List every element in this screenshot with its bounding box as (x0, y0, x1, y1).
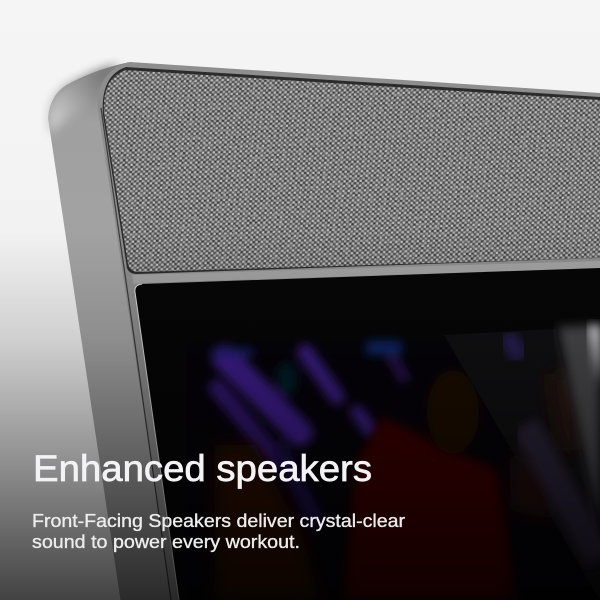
display screen (135, 268, 600, 600)
screen edge highlight (135, 284, 179, 600)
right dim figures (510, 372, 580, 520)
frame inner groove (101, 108, 171, 600)
device front frame (98, 62, 600, 600)
reflected top purple (505, 335, 522, 358)
screen video content (186, 325, 600, 600)
description: sound to power every workout. (32, 532, 300, 552)
bottom dark gradient overlay (0, 230, 600, 600)
figure head (427, 370, 479, 454)
description (32, 511, 405, 552)
title: Enhanced speakers (33, 448, 372, 489)
brightest highlight (588, 325, 600, 385)
dark gap around speaker (103, 67, 600, 274)
metal strip below speaker (132, 261, 600, 284)
right reflection glass (444, 330, 561, 440)
purple light streaks (215, 348, 404, 520)
description: Front-Facing Speakers deliver crystal-clear (32, 511, 405, 531)
speaker fabric grille (104, 70, 600, 272)
window reflection (558, 325, 600, 530)
left dim figure (215, 445, 320, 600)
device side face (48, 62, 180, 600)
device side top highlight (48, 64, 118, 135)
reflected purple band (525, 425, 600, 560)
red shirt figure (344, 417, 515, 600)
